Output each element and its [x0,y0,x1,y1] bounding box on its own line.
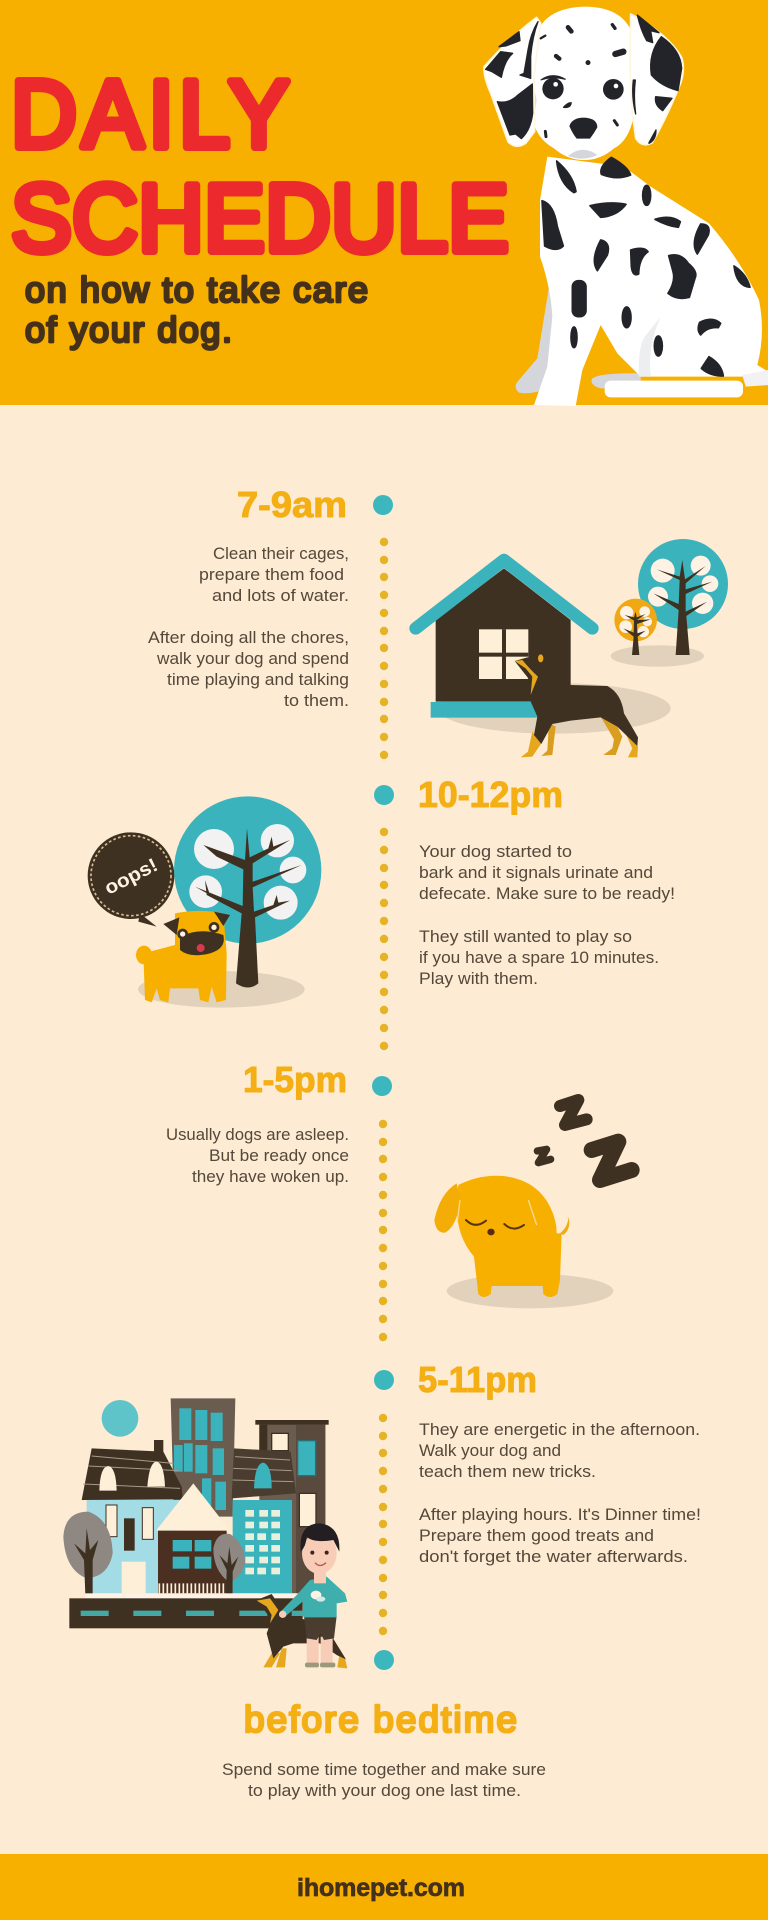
text block: 10-12pm: They still wanted to play so [419,927,632,946]
text block: 5-11pm: teach them new tricks. [419,1462,596,1481]
text block: 1-5pm: they have woken up. [192,1167,349,1186]
heading: 5-11pm: 5-11pm [418,1359,537,1400]
illustration: dalmatian [484,7,768,406]
timeline [372,495,394,1670]
text block: 7-9am: walk your dog and spend [156,649,349,668]
speech bubble: oops! [101,855,161,899]
footer band [0,1854,768,1920]
text block: 7-9am: Clean their cages, [213,544,349,563]
title: SCHEDULE [11,164,509,272]
text block: 5-11pm [419,1420,701,1566]
head [532,7,635,160]
header banner [0,0,768,405]
text block: 5-11pm: After playing hours. It's Dinner time! [419,1505,701,1524]
heading: 1-5pm: 1-5pm [243,1059,347,1100]
illustration: dog house, dog and trees [416,539,728,757]
icon: Z letters [537,1100,632,1180]
text block: 7-9am: prepare them food [199,565,344,584]
heading: 7-9am: 7-9am [237,484,347,525]
text block: 1-5pm: But be ready once [209,1146,349,1165]
footer text: ihomepet.com [297,1874,465,1902]
text block: 5-11pm: don't forget the water afterwards. [419,1547,688,1566]
text block: before bedtime: Spend some time together and make sure [222,1760,546,1779]
speech bubble [88,832,174,927]
subtitle: of your dog. [25,309,232,350]
text block: 5-11pm: Walk your dog and [419,1441,561,1460]
subtitle: on how to take care [25,269,368,310]
text block: before bedtime [222,1760,546,1800]
subtitle [25,269,368,350]
ears [484,17,541,146]
text block: 10-12pm: Play with them. [419,969,538,988]
text block: 10-12pm [419,842,675,988]
title: DAILY [11,60,289,168]
text block: 7-9am [148,544,349,710]
text block: 10-12pm: if you have a spare 10 minutes. [419,948,659,967]
heading: before bedtime: before bedtime [244,1699,517,1740]
text block: 5-11pm: They are energetic in the afternoon. [419,1420,700,1439]
text block: 7-9am: to them. [284,691,349,710]
text block: before bedtime: to play with your dog one last time. [248,1781,521,1800]
text block: 1-5pm [166,1125,349,1186]
text block: 10-12pm: bark and it signals urinate and [419,863,653,882]
text block: 10-12pm: defecate. Make sure to be ready! [419,884,675,903]
title [11,60,509,272]
text block: 7-9am: After doing all the chores, [148,628,349,647]
illustration: city, boy and dog [63,1398,347,1668]
text block: 7-9am: and lots of water. [212,586,349,605]
illustration: sleeping dog [434,1100,632,1308]
text block: 10-12pm: Your dog started to [419,842,572,861]
text block: 5-11pm: Prepare them good treats and [419,1526,654,1545]
illustration: pug, tree and speech bubble [88,796,321,1008]
heading: 10-12pm: 10-12pm [418,774,563,815]
text block: 7-9am: time playing and talking [167,670,349,689]
text block: 1-5pm: Usually dogs are asleep. [166,1125,349,1144]
